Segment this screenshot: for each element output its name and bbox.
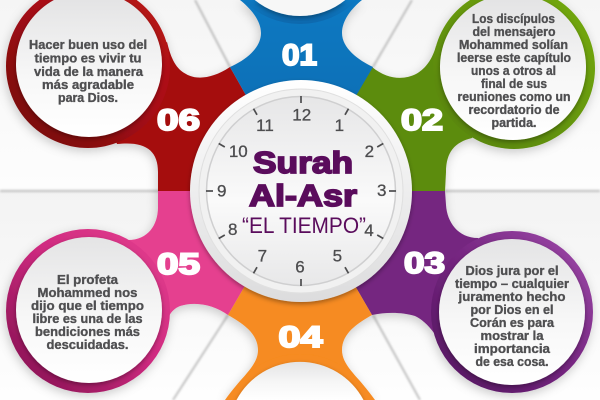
number 02: 02	[401, 104, 443, 137]
callout 02: Mohammed solían	[459, 37, 568, 52]
petal 05 pink	[6, 191, 300, 393]
callout 06	[16, 0, 162, 137]
clock numerals	[217, 106, 386, 277]
callout 02: reuniones como un	[458, 89, 571, 104]
callout 05: El profeta	[57, 272, 119, 287]
number 06: 06	[157, 104, 200, 137]
callout 05: Mohammed nos	[38, 285, 138, 300]
bottom disc (orange)	[236, 362, 364, 400]
callout 03: tiempo – cualquier	[455, 276, 569, 291]
clock numerals: 6	[295, 258, 305, 277]
petal 06 red	[6, 0, 300, 191]
clock numerals: 1	[335, 116, 344, 135]
number 03: 03	[404, 247, 445, 280]
clock numerals: 3	[377, 181, 386, 200]
callout 03: juramento hecho	[457, 289, 566, 304]
callout 02: partida.	[492, 115, 536, 130]
top disc (blue)	[255, 0, 345, 16]
callout 02	[440, 0, 586, 140]
clock numerals: 8	[228, 220, 237, 239]
number 04: 04	[278, 321, 323, 354]
callout 03: de esa cosa.	[476, 354, 548, 369]
clock	[190, 80, 412, 302]
clock ticks	[206, 96, 396, 286]
callout 02: leerse este capítulo	[457, 50, 571, 65]
callout 02: recordatorio de	[468, 102, 560, 117]
callout 02: final de sus	[481, 76, 547, 91]
number 05: 05	[157, 248, 200, 281]
petal 04 orange	[225, 191, 375, 400]
petal 03 purple	[300, 191, 593, 393]
callout 06: tiempo es vivir tu	[34, 50, 142, 66]
clock rim	[190, 80, 412, 302]
callout 03	[439, 239, 585, 385]
callout 02: unos a otros al	[471, 63, 556, 78]
callout 02: Los discípulos	[472, 11, 555, 26]
callout 05: bendiciones más	[35, 324, 140, 339]
clock face	[206, 96, 396, 286]
callout 03: por Dios en el	[470, 302, 554, 317]
clock title: “EL TIEMPO”	[242, 213, 366, 238]
clock numerals: 10	[229, 142, 248, 161]
clock title: Al-Asr	[249, 178, 357, 213]
clock numerals: 12	[292, 106, 311, 124]
clock numerals: 9	[217, 182, 226, 201]
petal 01 blue	[230, 0, 373, 191]
clock title	[242, 145, 366, 238]
clock title: Surah	[253, 145, 353, 180]
callout 06: Hacer buen uso del	[29, 37, 147, 52]
clock numerals: 11	[256, 116, 274, 135]
callout 06: vida de la manera	[34, 64, 144, 79]
clock numerals: 4	[364, 221, 374, 240]
callout 06: más agradable	[42, 77, 134, 92]
callout 05: dijo que el tiempo	[31, 298, 144, 313]
callout 06: para Dios.	[58, 90, 118, 105]
callout 02: del mensajero	[472, 24, 556, 39]
callout 03: Corán es para	[470, 315, 555, 330]
clock numerals: 5	[333, 247, 342, 266]
number 01: 01	[282, 39, 317, 72]
petal 02 green	[300, 0, 595, 191]
callout 03: mostrar la	[480, 328, 544, 343]
callout 05: descuidadas.	[46, 337, 128, 352]
clock numerals: 7	[258, 247, 267, 266]
clock numerals: 2	[365, 142, 374, 161]
callout 05: libre es una de las	[32, 311, 142, 326]
callout 03: Dios jura por el	[466, 263, 558, 278]
callout 03: importancia	[474, 341, 551, 356]
callout 05	[16, 237, 162, 383]
